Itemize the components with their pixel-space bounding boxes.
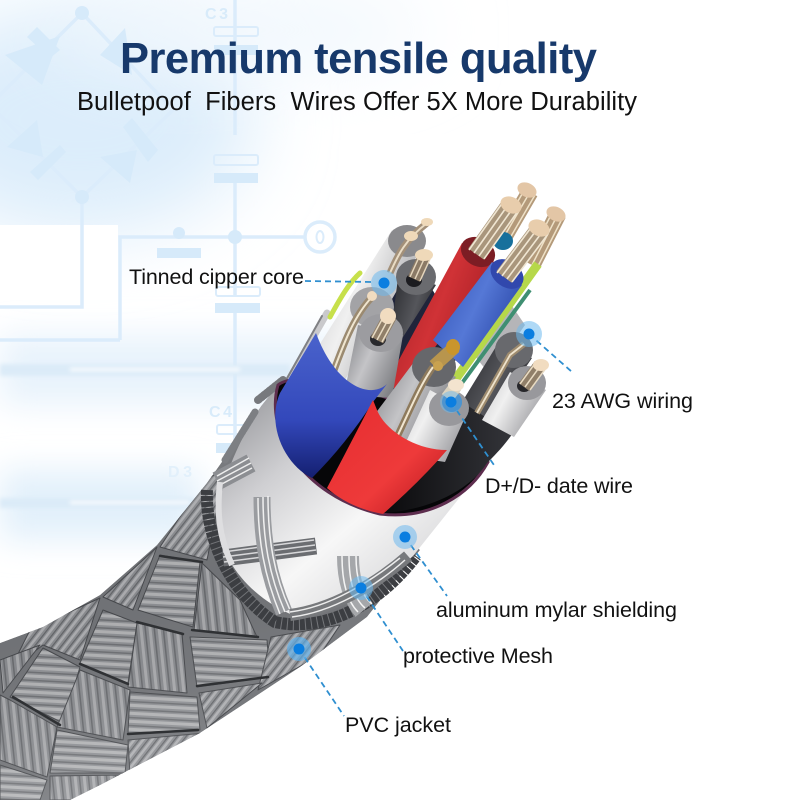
label: tinned copper core: Tinned cipper core: [129, 265, 304, 289]
weave patches: [0, 470, 340, 800]
label: PVC jacket: PVC jacket: [345, 713, 451, 737]
marker: 23 AWG wiring: [516, 321, 542, 347]
black sheath: [383, 403, 515, 513]
label: aluminum mylar shielding: aluminum mylar shielding: [436, 598, 677, 622]
large white wire, rear left: [318, 218, 433, 380]
circuit diagram background: [0, 0, 335, 500]
label: data wire: D+/D- date wire: [485, 474, 633, 498]
circuit labels: C3: [205, 6, 228, 23]
gold wire: [397, 339, 460, 437]
marker: tinned copper core: [371, 270, 397, 296]
silver shielding collar: [218, 385, 488, 616]
glowing horizontal light bands: [0, 364, 290, 508]
blue sheath: [275, 333, 387, 478]
dark backing behind wires: [340, 278, 470, 400]
back strands red: [500, 189, 563, 268]
leader lines: [299, 281, 572, 716]
rear wires bundle: [455, 179, 568, 383]
right white sleeve: [482, 359, 549, 437]
cable opening: [275, 379, 488, 515]
label: 23 AWG wiring: 23 AWG wiring: [552, 389, 693, 413]
title: Premium tensile quality: [120, 35, 597, 83]
left wire group: [333, 291, 403, 398]
dark braid ring: [207, 490, 416, 624]
blue wire: [433, 216, 552, 367]
silver flap and green inner foil: [225, 273, 360, 460]
marker: PVC jacket: [287, 637, 311, 661]
circuit labels: C4: [209, 404, 232, 421]
back gray filler: [470, 300, 525, 375]
lime wire: [455, 264, 538, 380]
front white sleeve: [400, 379, 469, 462]
front red sheath: [327, 400, 447, 514]
right dark sleeve: [462, 332, 533, 420]
subtitle: Bulletpoof Fibers Wires Offer 5X More Durability: [77, 88, 637, 116]
circuit labels: [168, 6, 232, 481]
red wire: [387, 193, 524, 395]
front gray sleeve: [372, 347, 456, 450]
circuit labels: D3: [168, 464, 192, 481]
marker: data wire: [440, 391, 462, 413]
collar woven strands: [217, 458, 408, 617]
mid gray sleeve rear: [350, 287, 394, 327]
label: protective mesh: protective Mesh: [403, 644, 553, 668]
dark wire: [392, 249, 436, 350]
marker: aluminum mylar shielding: [393, 525, 417, 549]
marker: protective mesh: [349, 576, 373, 600]
braided cable jacket: [0, 405, 420, 800]
soft shading on braid: [0, 510, 252, 800]
